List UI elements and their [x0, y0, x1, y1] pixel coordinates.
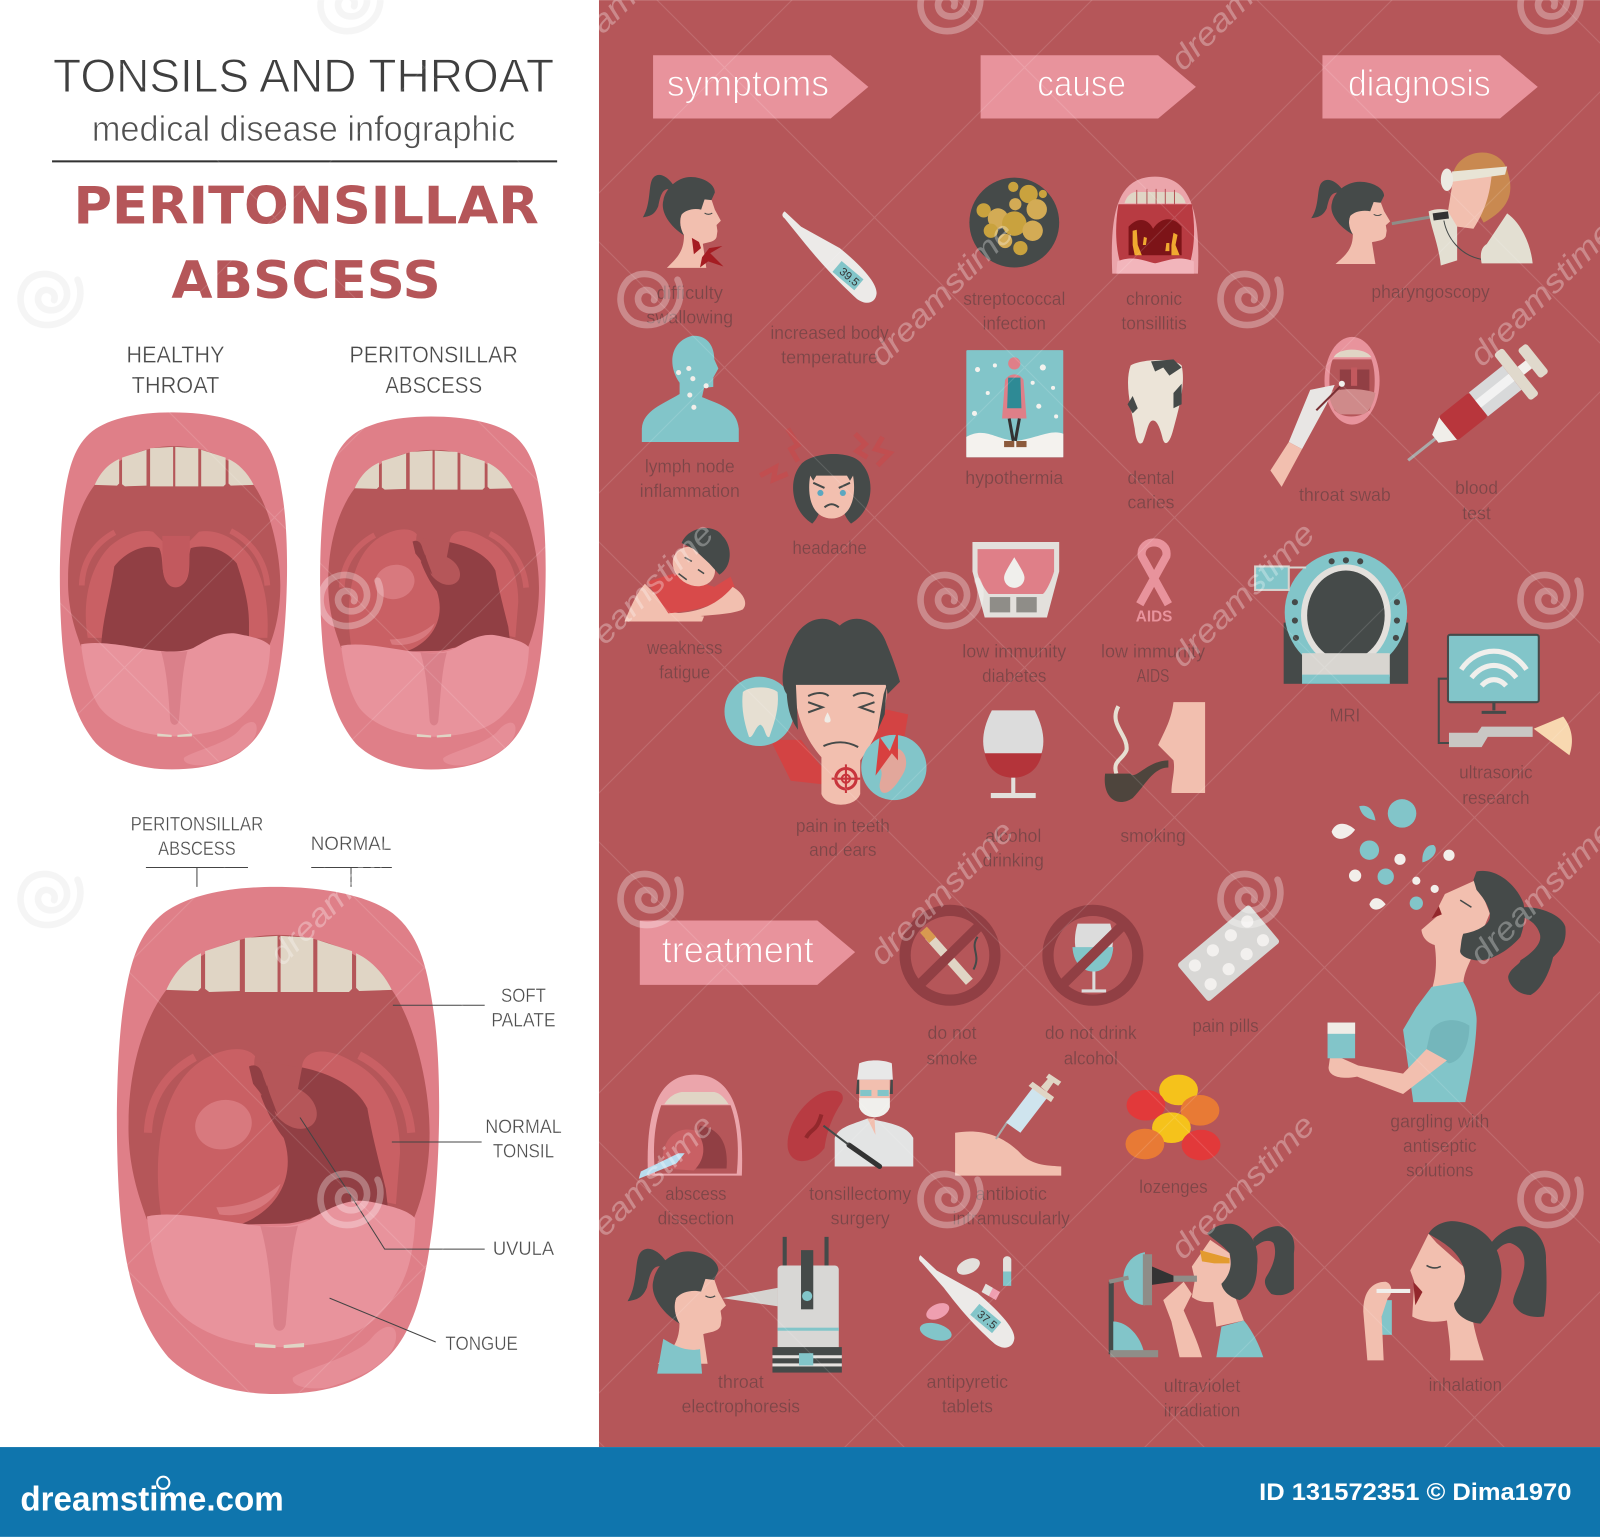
footer logo: dreamstime.com [20, 1480, 284, 1518]
label: tonsillectomy surgery [809, 1183, 912, 1229]
label: lymph node inflammation: inflammation [640, 480, 740, 501]
label: streptococcal infection: infection [983, 313, 1046, 334]
caption: healthy throat [127, 341, 225, 398]
label: do not smoke: do not [928, 1022, 977, 1043]
banner: cause [981, 55, 1196, 118]
label: pharyngoscopy: pharyngoscopy [1371, 281, 1491, 302]
icon: lymph nodes [642, 336, 739, 442]
callout: uvula: UVULA [493, 1238, 554, 1260]
icon: lozenges [1126, 1075, 1220, 1160]
label: difficulty swallowing [646, 282, 733, 328]
icon: thermometer: 39.5 [837, 266, 861, 289]
label: increased body temperature [770, 322, 890, 367]
label: low immunity diabetes [962, 640, 1067, 686]
label: throat swab: throat swab [1299, 484, 1391, 505]
label: chronic tonsillitis: chronic [1126, 288, 1182, 309]
callout: peritonsillar abscess: PERITONSILLAR [131, 814, 263, 836]
label: abscess dissection: abscess [665, 1183, 727, 1204]
icon: gargling [1328, 799, 1566, 1102]
label: gargling: gargling with [1390, 1111, 1489, 1132]
watermark overlay: dreamstime [562, 515, 721, 674]
label: pain in teeth and ears: and ears [809, 839, 877, 860]
label: weakness fatigue [646, 637, 722, 683]
icon: ultrasound [1439, 635, 1572, 755]
label: blood test: blood [1455, 477, 1498, 498]
label: MRI: MRI [1330, 705, 1360, 726]
subheading: medical disease infographic [92, 109, 515, 149]
label: difficulty swallowing: swallowing [646, 307, 733, 328]
icon: dental caries [1128, 359, 1183, 444]
watermark overlay: dreamstime [1163, 515, 1322, 674]
banner: cause: cause [1037, 63, 1126, 104]
label: headache: headache [792, 537, 867, 558]
heading rule [52, 160, 557, 162]
label: hypothermia: hypothermia [965, 467, 1064, 488]
icon: pipe smoking [1105, 702, 1205, 802]
label: chronic tonsillitis [1121, 288, 1187, 334]
label: low immunity AIDS [1101, 640, 1206, 686]
label: tonsillectomy surgery: tonsillectomy [809, 1183, 912, 1204]
icon: inhalation [1363, 1221, 1547, 1360]
icon: thermometer [782, 211, 877, 303]
footer credit: ID 131572351 © Dima1970 [1259, 1479, 1571, 1506]
icon: do not drink alcohol [1048, 910, 1138, 1000]
label: pain in teeth and ears: pain in teeth [796, 815, 890, 836]
label: streptococcal infection: streptococcal [963, 288, 1065, 309]
watermark overlay: dreamstime [1462, 813, 1600, 972]
label: antipyretic tablets [927, 1371, 1008, 1416]
label: throat electrophoresis: electrophoresis [682, 1395, 800, 1416]
mouth: healthy [60, 412, 287, 769]
label: gargling [1390, 1111, 1489, 1181]
panel: peritonsillar abscess small [320, 341, 546, 769]
label: low immunity AIDS: AIDS [1137, 665, 1169, 686]
icon: antipyretic tablets: 37.5 [974, 1309, 999, 1332]
icon: difficulty swallowing [643, 175, 723, 268]
label: antibiotic intramuscularly: intramuscularly [953, 1208, 1071, 1229]
label: antipyretic tablets: tablets [942, 1395, 993, 1416]
watermark overlay: dreamstime [262, 813, 421, 972]
label: do not smoke: smoke [927, 1047, 978, 1068]
callout: normal tonsil: NORMAL [485, 1116, 562, 1138]
label: abscess dissection [658, 1183, 734, 1229]
icon: glucose device [972, 542, 1059, 617]
callout: peritonsillar abscess [131, 814, 263, 887]
label: do not drink alcohol [1045, 1022, 1138, 1068]
watermark overlay: dreamstime [862, 813, 1021, 972]
label: weakness fatigue: fatigue [659, 662, 710, 683]
icon: antipyretic tablets [918, 1255, 1014, 1348]
icon: pain pills blister [1177, 904, 1280, 1002]
mouth: abscess [320, 416, 546, 769]
icon: hypothermia card [966, 350, 1063, 457]
banner: symptoms [653, 55, 868, 118]
mouth: large abscess diagram [117, 887, 439, 1394]
label: low immunity diabetes: diabetes [982, 665, 1046, 686]
icon: pain in teeth and ears [724, 619, 927, 805]
disease name: ABSCESS [171, 251, 441, 311]
callout: soft palate: PALATE [491, 1010, 556, 1032]
heading: tonsils and throat: TONSILS AND THROAT [53, 50, 554, 102]
disease name [73, 177, 539, 311]
icon: AIDS ribbon: AIDS [1136, 609, 1172, 626]
icon: wine glass [983, 710, 1043, 798]
white left panel [0, 0, 599, 1447]
watermark overlay: dreamstime [1163, 1107, 1322, 1266]
icon: pharyngoscopy [1311, 153, 1533, 265]
caption: healthy throat: THROAT [132, 372, 219, 398]
label: low immunity AIDS: low immunity [1101, 640, 1206, 661]
watermark overlay: dreamstime [1462, 214, 1600, 373]
label: ultrasonic research [1459, 762, 1533, 808]
caption: peritonsillar abscess [349, 341, 518, 398]
label: lymph node inflammation [640, 456, 740, 501]
label: abscess dissection: dissection [658, 1208, 734, 1229]
icon: headache [760, 429, 890, 524]
label: blood test [1455, 477, 1498, 524]
icon: ultraviolet irradiation [1109, 1224, 1294, 1357]
icon: blood test syringe [1390, 334, 1556, 483]
icon: abscess dissection [639, 1075, 742, 1179]
label: throat electrophoresis [682, 1371, 800, 1416]
label: ultrasonic research: research [1462, 787, 1530, 808]
callout: soft palate [393, 985, 556, 1032]
label: do not smoke [927, 1022, 978, 1068]
callout: tongue: TONGUE [445, 1333, 518, 1355]
callout: normal tonsil [392, 1116, 562, 1162]
panel: healthy throat [60, 341, 287, 769]
label: increased body temperature: temperature [781, 346, 878, 367]
label: blood test: test [1462, 503, 1491, 524]
panel: labelled anatomy diagram [117, 814, 562, 1394]
label: do not drink alcohol: alcohol [1064, 1047, 1118, 1068]
label: ultraviolet irradiation [1164, 1375, 1240, 1420]
label: dental caries: caries [1128, 491, 1174, 512]
footer bar [0, 1447, 1600, 1537]
label: chronic tonsillitis: tonsillitis [1121, 313, 1187, 334]
label: streptococcal infection [963, 288, 1065, 334]
icon: do not smoke [905, 910, 995, 1000]
caption: peritonsillar abscess: ABSCESS [385, 372, 482, 398]
icon: throat electrophoresis [628, 1237, 842, 1374]
callout: normal [311, 833, 392, 887]
banner: diagnosis [1322, 55, 1538, 118]
label: lozenges: lozenges [1139, 1176, 1208, 1197]
watermark overlay: dreamstime [862, 214, 1021, 373]
label: dental caries [1128, 467, 1174, 512]
label: alcohol drinking: alcohol [985, 825, 1041, 846]
icon: antibiotic injection [955, 1074, 1061, 1176]
label: do not drink alcohol: do not drink [1045, 1022, 1138, 1043]
label: dental caries: dental [1128, 467, 1174, 488]
callout: soft palate: SOFT [501, 985, 546, 1007]
label: increased body temperature: increased body [770, 322, 890, 343]
label: ultrasonic research: ultrasonic [1459, 762, 1533, 783]
title block [52, 50, 557, 311]
label: tonsillectomy surgery: surgery [831, 1208, 891, 1229]
icon: MRI scanner [1255, 551, 1408, 684]
label: throat electrophoresis: throat [718, 1371, 764, 1392]
icon: AIDS ribbon [1136, 542, 1172, 626]
callout: tongue [330, 1298, 518, 1355]
label: weakness fatigue: weakness [646, 637, 722, 658]
icon: tonsillectomy surgeon [788, 1060, 913, 1166]
callout: normal: NORMAL [311, 833, 392, 855]
label: pain pills: pain pills [1192, 1015, 1259, 1036]
icon: throat swab [1270, 337, 1380, 487]
banner: treatment [640, 921, 855, 985]
label: difficulty swallowing: difficulty [657, 282, 724, 303]
banner: treatment: treatment [662, 929, 814, 970]
label: lymph node inflammation: lymph node [645, 456, 735, 477]
rose right panel [599, 0, 1600, 1447]
label: antipyretic tablets: antipyretic [927, 1371, 1008, 1392]
disease name: PERITONSILLAR [73, 177, 539, 237]
caption: peritonsillar abscess: PERITONSILLAR [349, 341, 518, 367]
label: antibiotic intramuscularly: antibiotic [976, 1183, 1047, 1204]
callout: peritonsillar abscess: ABSCESS [158, 838, 236, 860]
icon: chronic tonsillitis [1112, 177, 1198, 274]
callout: uvula [300, 1117, 554, 1260]
label: alcohol drinking [983, 825, 1044, 870]
caption: healthy throat: HEALTHY [127, 341, 225, 367]
banner: symptoms: symptoms [667, 63, 829, 104]
label: inhalation: inhalation [1429, 1374, 1502, 1395]
label: ultraviolet irradiation: irradiation [1164, 1399, 1240, 1420]
icon: streptococcus [969, 178, 1059, 267]
label: alcohol drinking: drinking [983, 849, 1044, 870]
watermark overlay: dreamstime [562, 1107, 721, 1266]
callout: normal tonsil: TONSIL [493, 1140, 554, 1162]
banner: diagnosis: diagnosis [1348, 63, 1491, 104]
label: smoking: smoking [1120, 825, 1186, 846]
label: ultraviolet irradiation: ultraviolet [1164, 1375, 1240, 1396]
label: gargling: solutions [1406, 1160, 1473, 1181]
label: gargling: antiseptic [1403, 1135, 1477, 1156]
icon: weakness and fatigue [624, 528, 745, 622]
label: pain in teeth and ears [796, 815, 890, 860]
label: antibiotic intramuscularly [953, 1183, 1071, 1229]
label: low immunity diabetes: low immunity [962, 640, 1067, 661]
